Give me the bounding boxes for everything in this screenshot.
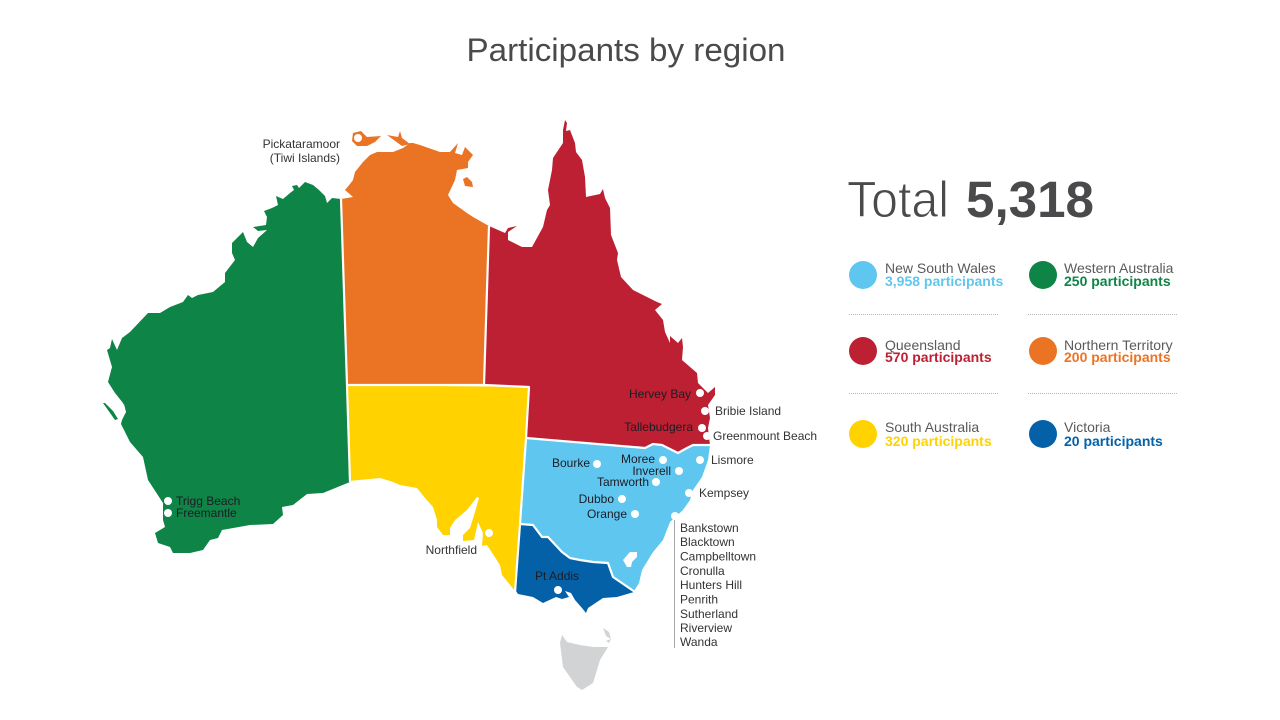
- place labels: Cronulla: [680, 564, 725, 578]
- region: Victoria: [516, 524, 634, 613]
- legend: Victoria: [1029, 419, 1163, 449]
- place labels: Campbelltown: [680, 550, 756, 564]
- place labels: Sutherland: [680, 607, 738, 621]
- place labels: Penrith: [680, 592, 718, 606]
- place labels: Moree: [621, 452, 655, 466]
- place labels: Trigg Beach: [176, 494, 240, 508]
- place labels: Orange: [587, 507, 627, 521]
- place labels: Northfield: [426, 543, 477, 557]
- legend: Victoria: Victoria: [1064, 419, 1111, 435]
- place labels: Kempsey: [699, 486, 749, 500]
- title: Participants by region: [466, 32, 786, 68]
- legend: Queensland: [849, 337, 992, 365]
- region: Western Australia: [103, 182, 350, 553]
- Shark Bay peninsula: [103, 403, 118, 420]
- place labels: Hervey Bay: [629, 387, 691, 401]
- region: Northern Territory: [341, 131, 489, 385]
- place labels: Inverell: [632, 464, 671, 478]
- legend: Queensland: 570 participants: [885, 349, 992, 365]
- legend: New South Wales: [849, 260, 1003, 289]
- legend: Northern Territory: 200 participants: [1064, 349, 1171, 365]
- region: New South Wales: [520, 438, 710, 591]
- region: Australian Capital Territory cut-out: [623, 552, 637, 567]
- place labels: (Tiwi Islands): [270, 151, 340, 165]
- legend: South Australia: 320 participants: [885, 433, 992, 449]
- legend dividers: [849, 314, 1177, 394]
- place labels: Wanda: [680, 635, 718, 649]
- Sydney leader line: [674, 520, 676, 648]
- legend: South Australia: [849, 419, 992, 449]
- region: Tasmania: [560, 628, 611, 690]
- total heading: 5,318: [966, 171, 1094, 228]
- legend: Northern Territory: [1029, 337, 1173, 365]
- legend: Western Australia: 250 participants: [1064, 273, 1171, 289]
- legend: New South Wales: 3,958 participants: [885, 273, 1003, 289]
- place labels: Hunters Hill: [680, 578, 742, 592]
- place labels: Pt Addis: [535, 569, 579, 583]
- place labels: Lismore: [711, 453, 754, 467]
- place labels: Greenmount Beach: [713, 429, 817, 443]
- place labels: Tallebudgera: [624, 420, 693, 434]
- legend: Victoria: 20 participants: [1064, 433, 1163, 449]
- legend: Queensland: Queensland: [885, 337, 961, 353]
- legend: New South Wales: New South Wales: [885, 260, 996, 276]
- place labels: Pickataramoor: [263, 137, 340, 151]
- place labels: Tamworth: [597, 475, 649, 489]
- state borders: [341, 199, 711, 592]
- map of Australia: [103, 120, 817, 690]
- location markers: [164, 134, 711, 594]
- place labels: Bankstown: [680, 521, 739, 535]
- region: Queensland: [484, 120, 715, 453]
- place labels: Blacktown: [680, 535, 735, 549]
- place labels: Riverview: [680, 621, 732, 635]
- total heading: [847, 171, 1094, 228]
- legend: Western Australia: Western Australia: [1064, 260, 1174, 276]
- Shark Bay inlet: [111, 403, 126, 420]
- place labels: [176, 137, 817, 649]
- place labels: Dubbo: [579, 492, 614, 506]
- place labels: Freemantle: [176, 506, 237, 520]
- place labels: Bribie Island: [715, 404, 781, 418]
- total heading: Total: [847, 171, 949, 228]
- place labels: Bourke: [552, 456, 590, 470]
- legend: Western Australia: [1029, 260, 1174, 289]
- region: South Australia: [347, 385, 529, 591]
- legend: Northern Territory: Northern Territory: [1064, 337, 1173, 353]
- legend: South Australia: South Australia: [885, 419, 979, 435]
